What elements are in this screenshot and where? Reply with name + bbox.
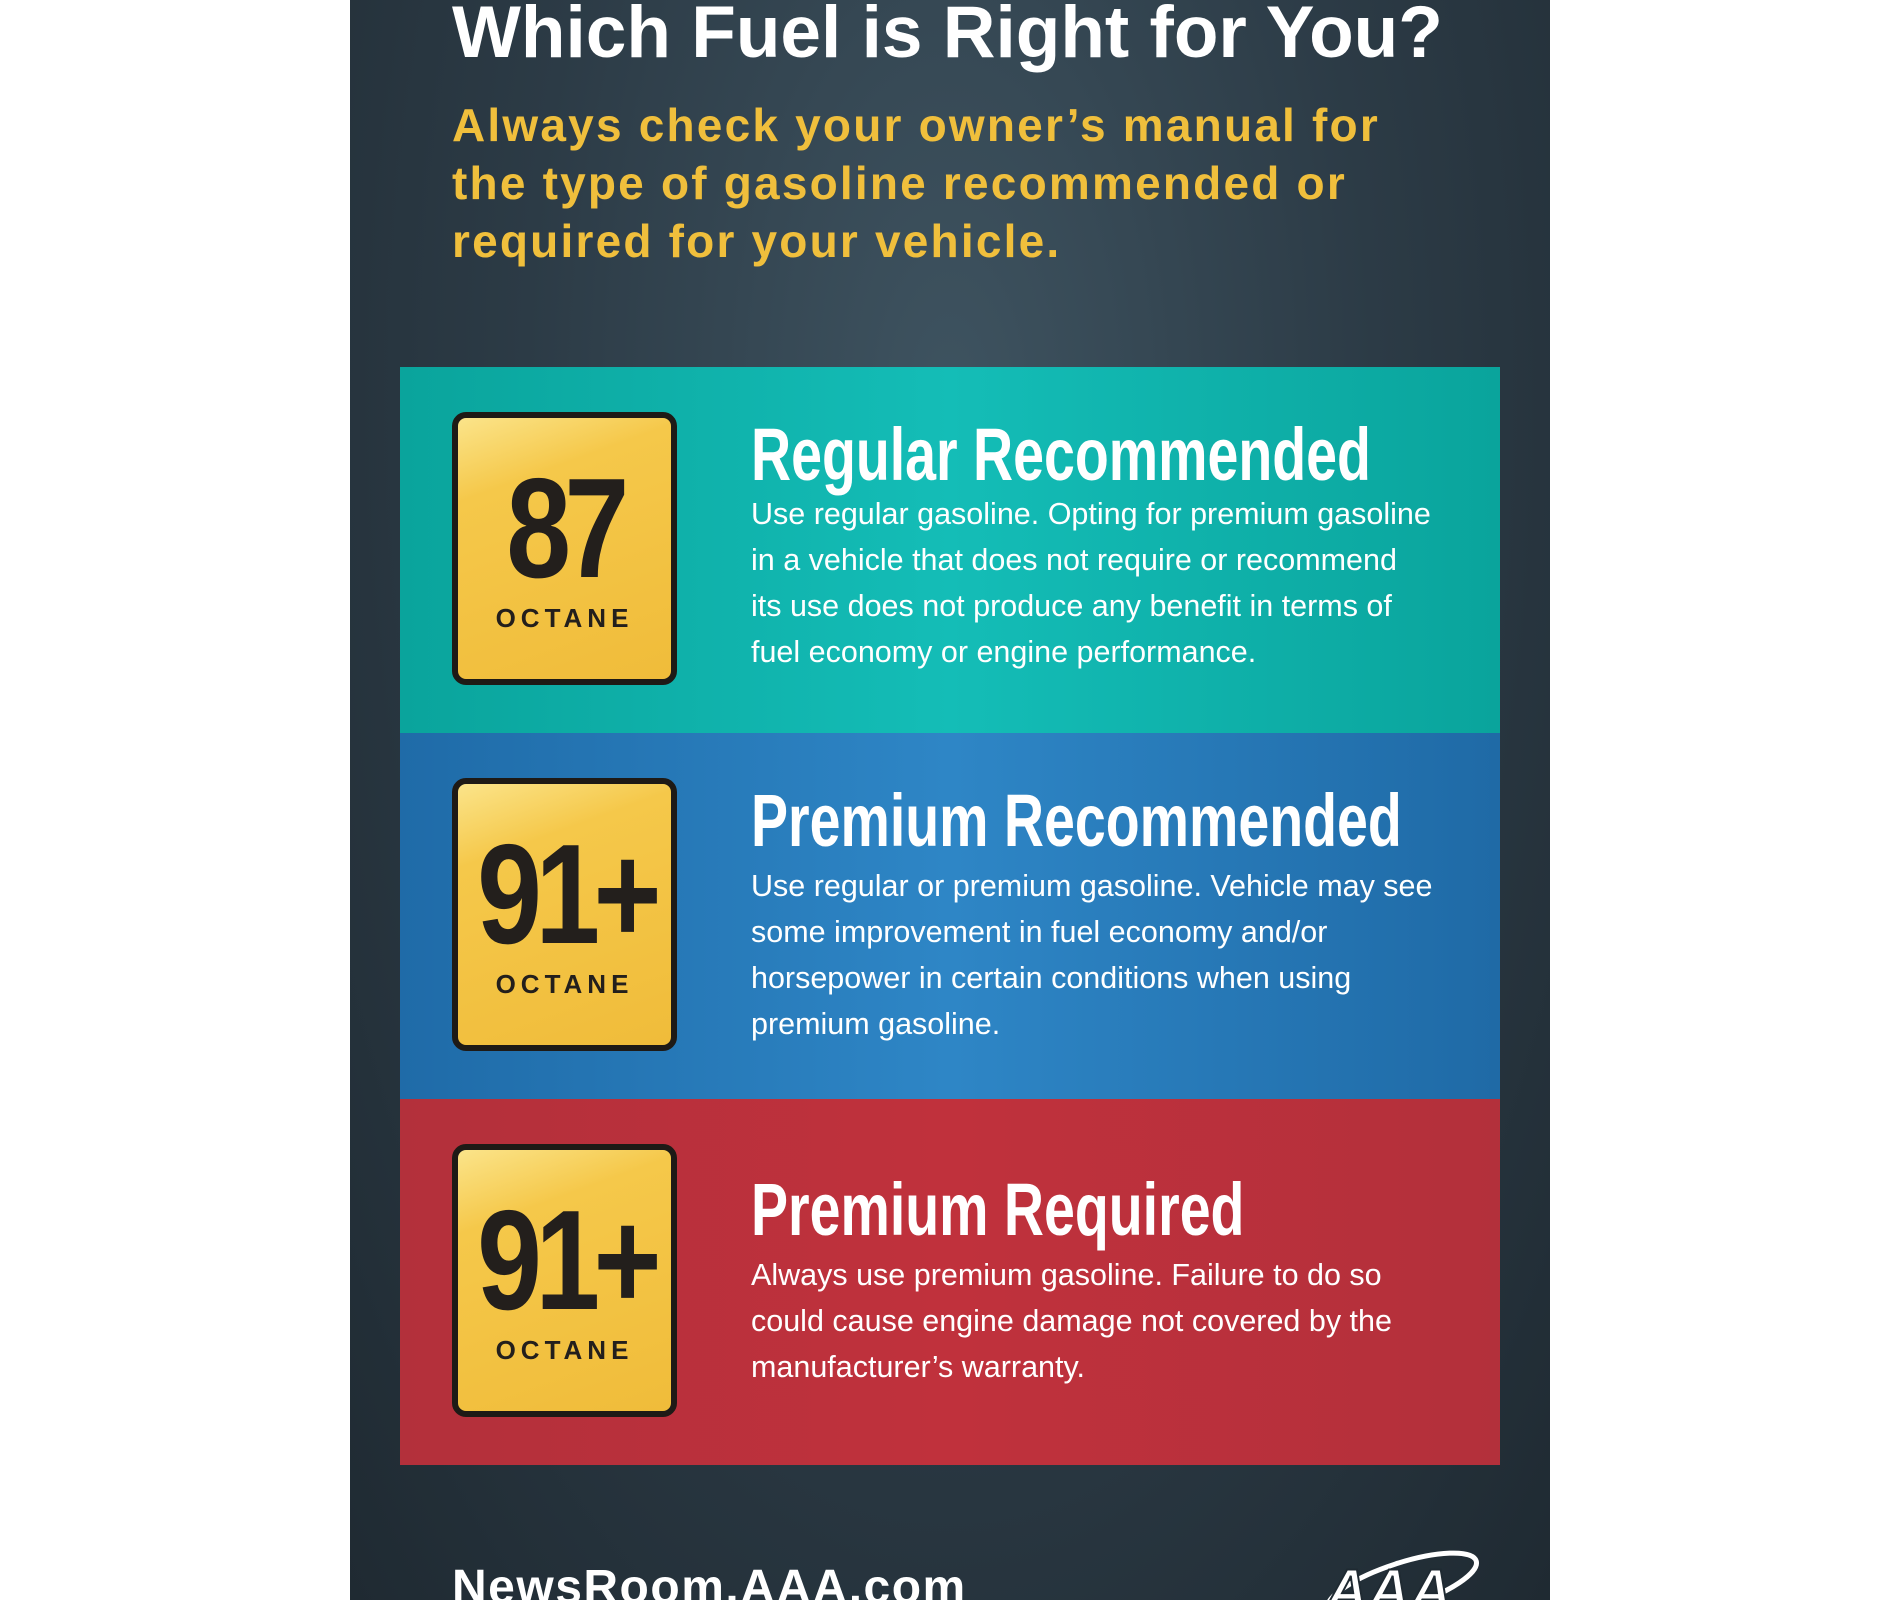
body text: Always use premium gasoline. Failure to do so: [751, 1258, 1382, 1292]
body text: premium gasoline.: [751, 1007, 1000, 1041]
badge: 87 octane: [452, 412, 677, 685]
badge: 91+ octane: OCTANE: [496, 1335, 633, 1365]
subtitle: the type of gasoline recommended or: [452, 157, 1347, 209]
badge: 91+ octane: [452, 778, 677, 1051]
badge: 91+ octane: 91+: [477, 815, 655, 974]
heading: Premium Required: [751, 1168, 1244, 1251]
heading: Premium Recommended: [751, 779, 1402, 862]
panel: premium required: [400, 1099, 1500, 1465]
body text: in a vehicle that does not require or recommend: [751, 543, 1397, 577]
subtitle: required for your vehicle.: [452, 215, 1061, 267]
badge: 91+ octane: [452, 1144, 677, 1417]
badge: 91+ octane: 91+: [477, 1181, 655, 1340]
logo: AAA: [1324, 1550, 1479, 1600]
footer url: NewsRoom.AAA.com: [452, 1561, 967, 1614]
body text: [751, 869, 1432, 1041]
body text: manufacturer’s warranty.: [751, 1350, 1085, 1384]
body text: horsepower in certain conditions when using: [751, 961, 1351, 995]
body text: Use regular gasoline. Opting for premium gasoline: [751, 497, 1431, 531]
body text: Use regular or premium gasoline. Vehicle may see: [751, 869, 1432, 903]
body text: some improvement in fuel economy and/or: [751, 915, 1327, 949]
body text: [751, 1258, 1392, 1384]
body text: [751, 497, 1431, 669]
panel: premium recommended: [400, 733, 1500, 1099]
body text: could cause engine damage not covered by the: [751, 1304, 1392, 1338]
heading: Regular Recommended: [751, 413, 1371, 496]
badge: 87 octane: OCTANE: [496, 603, 633, 633]
badge: 91+ octane: OCTANE: [496, 969, 633, 999]
panel: regular recommended: [400, 367, 1500, 733]
background panel: [350, 0, 1550, 1600]
body text: fuel economy or engine performance.: [751, 635, 1256, 669]
body text: its use does not produce any benefit in terms of: [751, 589, 1392, 623]
badge: 87 octane: 87: [506, 449, 623, 608]
subtitle: Always check your owner’s manual for: [452, 99, 1380, 151]
subtitle: [452, 99, 1380, 267]
